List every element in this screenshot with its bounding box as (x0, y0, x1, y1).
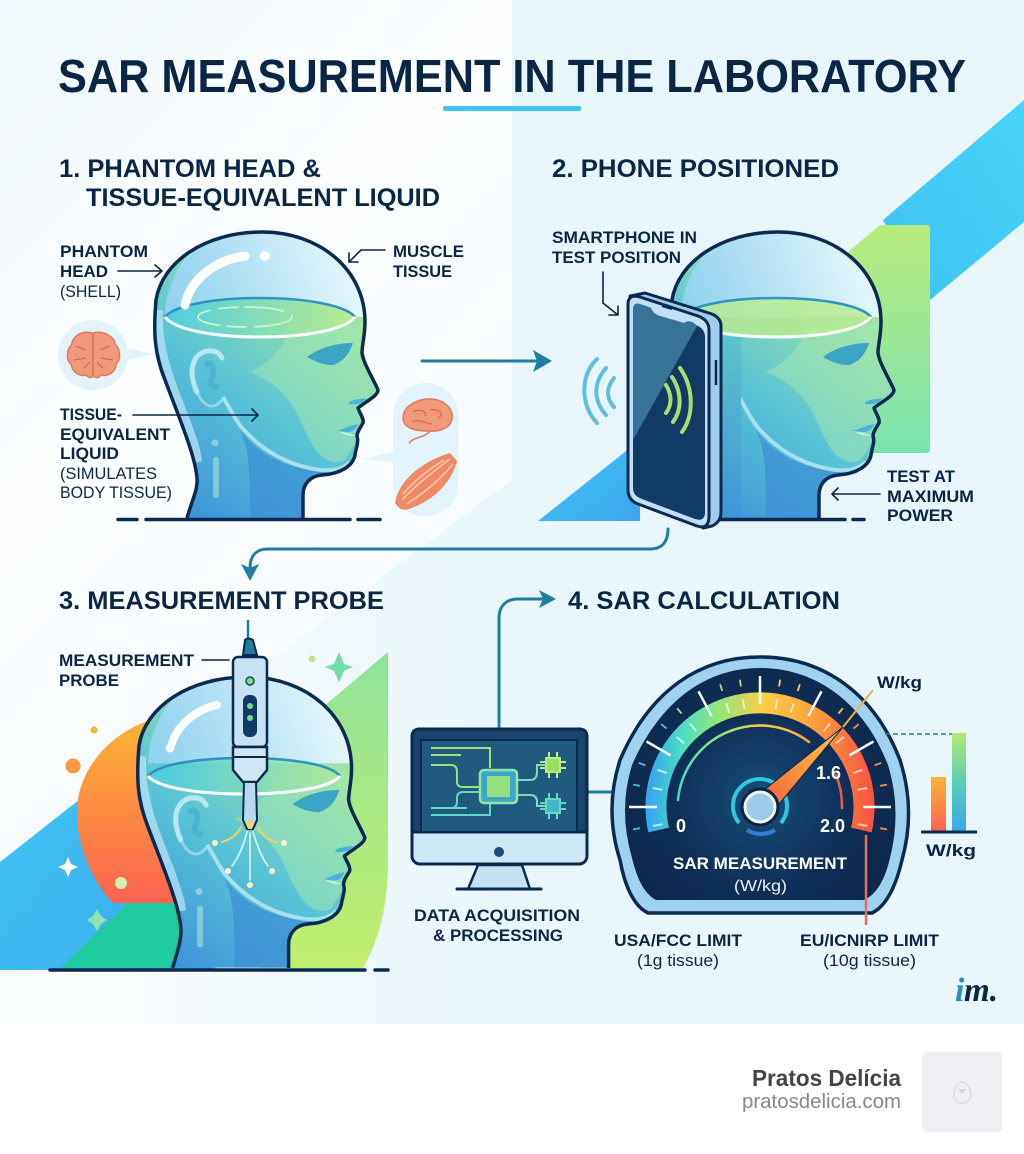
label: tissue-equivalent liquid: (SIMULATES (60, 464, 157, 483)
gauge caption (673, 854, 848, 895)
signal sparks (212, 827, 287, 888)
ground line (716, 518, 864, 521)
mini bar chart: W/kg (926, 841, 976, 860)
label: USA FCC limit: (1g tissue) (637, 951, 719, 970)
label: USA FCC limit: USA/FCC LIMIT (614, 931, 743, 950)
label: muscle tissue (393, 242, 464, 281)
panel: step 1 phantom head (58, 155, 464, 525)
label: test at maximum power: MAXIMUM (887, 487, 974, 506)
gauge caption: SAR MEASUREMENT (673, 854, 848, 873)
label: EU ICNIRP limit: (10g tissue) (823, 951, 916, 970)
label: data acquisition: & PROCESSING (433, 926, 563, 945)
label: tissue-equivalent liquid: LIQUID (60, 444, 119, 463)
decorative green shape (260, 652, 388, 968)
gauge scale numbers (676, 763, 845, 836)
label: test at maximum power: POWER (887, 506, 953, 525)
label: W/kg top: W/kg (877, 673, 922, 692)
title underline (443, 106, 581, 111)
label: muscle tissue: TISSUE (393, 262, 452, 281)
icon: brain and muscle capsule (362, 383, 458, 516)
heading: step 4: 4. SAR CALCULATION (568, 587, 840, 615)
label: test at maximum power: TEST AT (887, 467, 956, 486)
label: tissue-equivalent liquid (60, 405, 172, 502)
label: smartphone in test position: TEST POSITION (552, 248, 681, 267)
brand mark: m. (964, 972, 998, 1009)
decorative blue triangle (0, 693, 215, 970)
decorative teal shape (60, 903, 200, 968)
label: phantom head shell: HEAD (60, 262, 108, 281)
arrow: liquid (133, 409, 258, 421)
decorative cyan triangle (538, 440, 640, 521)
pointer: probe (202, 659, 229, 661)
arrow: smartphone (603, 272, 618, 315)
heading: step 2: 2. PHONE POSITIONED (552, 155, 839, 183)
label: test at maximum power (887, 467, 974, 525)
sparkles and dots (58, 652, 353, 931)
decorative green block (848, 225, 930, 453)
arrow: step 1 to step 2 (422, 350, 552, 372)
icon: smartphone (628, 293, 721, 528)
arrow: step 2 to step 3 (241, 529, 668, 581)
ground line (118, 518, 380, 521)
heading: step 1 (59, 155, 440, 212)
label: data acquisition (414, 906, 580, 945)
connector: monitor to gauge (587, 790, 612, 794)
label: measurement probe: PROBE (59, 671, 119, 690)
label: EU ICNIRP limit (800, 931, 940, 970)
head illustration (123, 670, 377, 975)
icon: computer monitor (412, 729, 587, 889)
heading: step 3: 3. MEASUREMENT PROBE (59, 587, 384, 615)
label: smartphone in test position (552, 228, 697, 267)
gauge scale numbers: 0 (676, 816, 686, 836)
SAR gauge (612, 657, 909, 913)
label: tissue-equivalent liquid: EQUIVALENT (60, 425, 171, 444)
panel: step 4 SAR calculation (412, 587, 977, 970)
arrow: test at maximum power (832, 488, 880, 500)
label: EU ICNIRP limit: EU/ICNIRP LIMIT (800, 931, 940, 950)
icon: radio waves (584, 359, 614, 423)
panel: step 3 measurement probe (0, 587, 388, 975)
heading: step 1: TISSUE-EQUIVALENT LIQUID (86, 184, 440, 212)
label: muscle tissue: MUSCLE (393, 242, 464, 261)
limit marker line (865, 835, 867, 925)
label: smartphone in test position: SMARTPHONE IN (552, 228, 697, 247)
footer brand text (742, 1065, 901, 1113)
label: data acquisition: DATA ACQUISITION (414, 906, 580, 925)
title: SAR MEASUREMENT IN THE LABORATORY (58, 50, 966, 102)
phantom head illustration (140, 225, 390, 525)
label: measurement probe: MEASUREMENT (59, 651, 195, 670)
gauge scale numbers: 1.6 (816, 763, 841, 783)
arrow: data to step 4 (499, 590, 556, 729)
heading: step 1: 1. PHANTOM HEAD & (59, 155, 321, 183)
label: phantom head shell: PHANTOM (60, 242, 148, 261)
label: phantom head shell: (SHELL) (60, 282, 121, 301)
panel: step 2 phone positioned (538, 155, 974, 528)
label: tissue-equivalent liquid: TISSUE- (60, 405, 122, 424)
gauge caption: (W/kg) (734, 878, 787, 895)
decorative orange shape (77, 717, 200, 903)
label: tissue-equivalent liquid: BODY TISSUE) (60, 483, 172, 502)
label: phantom head shell (60, 242, 148, 301)
brand mark: i (955, 972, 965, 1009)
arrow: muscle tissue (349, 250, 385, 262)
head illustration (656, 225, 906, 525)
ground line (50, 968, 388, 972)
gauge scale numbers: 2.0 (820, 816, 845, 836)
footer brand text: Pratos Delícia (752, 1065, 901, 1091)
mini bar chart (885, 733, 977, 860)
icon: brain bubble (58, 320, 153, 390)
label: measurement probe (59, 651, 195, 690)
footer logo tile (922, 1052, 1002, 1132)
footer brand text: pratosdelicia.com (742, 1091, 901, 1113)
label: USA FCC limit (614, 931, 743, 970)
icon: measurement probe (233, 620, 267, 829)
arrow: phantom head (118, 265, 162, 277)
